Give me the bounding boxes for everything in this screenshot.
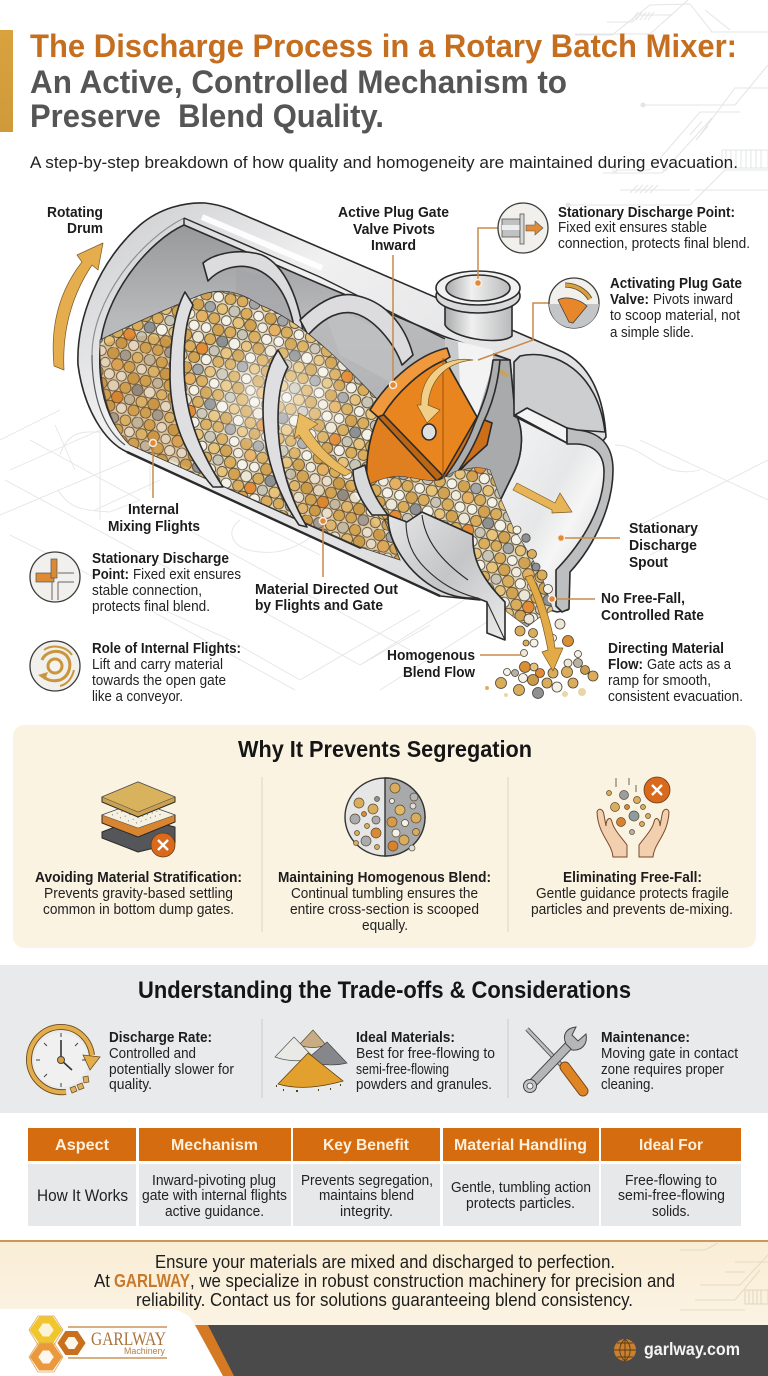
text: avoiding stratification: Prevents gravity-based settling — [44, 885, 233, 902]
table row: maintains blend — [319, 1187, 414, 1204]
arrow: flights carry material — [294, 413, 352, 476]
logo: Machinery — [124, 1346, 165, 1357]
title: The Discharge Process in a Rotary Batch Mixer: — [30, 28, 737, 64]
text: ideal materials — [356, 1029, 495, 1093]
falling particles — [485, 614, 598, 698]
footer bar — [0, 1309, 768, 1376]
callout: stationary discharge point top — [474, 203, 750, 286]
drum interior — [100, 225, 521, 548]
text: discharge rate — [109, 1029, 234, 1093]
label: no free-fall: No Free-Fall, — [601, 590, 685, 607]
label: internal mixing flights: Mixing Flights — [108, 518, 200, 535]
text: discharge rate: Discharge Rate: — [109, 1029, 212, 1046]
label: active plug gate: Active Plug Gate — [338, 204, 449, 221]
comparison table — [28, 1128, 741, 1226]
table row: semi-free-flowing — [618, 1187, 725, 1204]
cta text: GARLWAY — [114, 1271, 190, 1291]
table header: Material Handling — [454, 1137, 587, 1154]
table row: Prevents segregation, — [301, 1172, 433, 1189]
arrow: material flow down — [525, 575, 563, 671]
table header: Key Benefit — [323, 1137, 410, 1154]
blueprint background drawing — [0, 410, 768, 690]
text: ideal materials: powders and granules. — [356, 1076, 492, 1093]
text: maintaining blend: Continual tumbling ensures the — [291, 885, 478, 902]
label: homogenous blend flow — [387, 647, 522, 681]
plug gate valve — [367, 348, 492, 500]
heading: Why It Prevents Segregation — [238, 736, 532, 762]
callout: directing material flow: Gate acts as a — [647, 656, 732, 673]
front mixing flights — [170, 292, 223, 487]
rear mixing flights — [203, 252, 304, 340]
callout: stationary discharge point left: protects final blend. — [92, 598, 210, 615]
lower material stream — [365, 468, 553, 627]
label: rotating drum: Rotating — [47, 204, 103, 221]
front discharge flange — [353, 465, 505, 640]
label: homogenous blend flow: Blend Flow — [403, 664, 475, 681]
text: avoiding stratification — [35, 869, 242, 918]
callout: stationary discharge point top: connection, protects final blend. — [558, 235, 750, 252]
discharge pipe behind gate — [445, 338, 493, 417]
text: maintenance: Maintenance: — [601, 1029, 690, 1046]
text: eliminating free-fall: Gentle guidance protects fragile — [536, 885, 729, 902]
arrow: gate pivots inward — [417, 359, 473, 423]
callout: activating plug gate valve: a simple slide. — [610, 324, 694, 341]
website: garlway.com — [644, 1339, 740, 1359]
callout: role of internal flights: Lift and carry material — [92, 656, 223, 673]
table row — [37, 1172, 725, 1220]
title — [30, 28, 737, 134]
cta text — [94, 1252, 675, 1310]
text: eliminating free-fall: Eliminating Free-Fall: — [563, 869, 702, 886]
callout: role of internal flights — [30, 640, 241, 705]
call to action band — [0, 1240, 768, 1325]
cta text: At — [94, 1271, 110, 1291]
callout: stationary discharge point left — [30, 550, 241, 615]
table row: Free-flowing to — [625, 1172, 717, 1189]
cta text: Ensure your materials are mixed and discharged to perfection. — [155, 1252, 615, 1272]
callout: stationary discharge point left: stable connection, — [92, 582, 202, 599]
drum shell — [78, 203, 606, 600]
text: ideal materials: semi-free-flowing — [356, 1061, 449, 1078]
label: stationary discharge spout: Stationary — [629, 520, 699, 537]
callout: role of internal flights: towards the open gate — [92, 672, 226, 689]
label: stationary discharge spout: Spout — [629, 554, 668, 571]
icon: pipe junction — [30, 552, 80, 602]
callout: activating plug gate valve: Valve: — [610, 291, 649, 308]
callout: directing material flow: Directing Material — [608, 640, 724, 657]
website — [614, 1339, 740, 1361]
diagram: rotary batch mixer cutaway — [78, 203, 613, 698]
arrow: rotating drum — [53, 243, 103, 370]
right housing and spout — [497, 413, 610, 612]
label: no free-fall: Controlled Rate — [601, 607, 704, 624]
callout: stationary discharge point top: Stationary Discharge Point: — [558, 204, 735, 221]
arrow: spout flow — [513, 483, 572, 513]
text: maintenance: cleaning. — [601, 1076, 654, 1093]
panel: why it prevents segregation — [13, 725, 756, 948]
callout: directing material flow: Flow: — [608, 656, 643, 673]
label: active plug gate: Valve Pivots — [353, 221, 435, 238]
text: maintaining blend: Maintaining Homogenous Blend: — [278, 869, 491, 886]
table row: integrity. — [340, 1203, 393, 1220]
icon: spiral flight — [30, 641, 80, 691]
callout: activating plug gate valve: Activating Plug Gate — [610, 275, 742, 292]
label: rotating drum — [47, 204, 103, 237]
text: maintaining blend: entire cross-section is scooped — [290, 901, 479, 918]
table row: Inward-pivoting plug — [152, 1172, 276, 1189]
text: maintenance — [601, 1029, 739, 1093]
label: material directed out — [255, 518, 398, 614]
curved flight at gate — [445, 360, 500, 480]
label: material directed out: by Flights and Gate — [255, 597, 383, 614]
icon: clock — [29, 1027, 100, 1093]
text: maintenance: Moving gate in contact — [601, 1045, 739, 1062]
callout: role of internal flights: like a conveyor. — [92, 688, 183, 705]
heading: Understanding the Trade-offs & Considerations — [138, 977, 631, 1004]
table header: Ideal For — [639, 1137, 703, 1154]
text: eliminating free-fall — [531, 869, 733, 918]
callout: role of internal flights: Role of Internal Flights: — [92, 640, 241, 657]
text: maintaining blend — [278, 869, 491, 934]
label: rotating drum: Drum — [67, 220, 103, 237]
text: discharge rate: quality. — [109, 1076, 152, 1093]
label: internal mixing flights — [108, 440, 200, 535]
title: An Active, Controlled Mechanism to — [30, 64, 567, 100]
feed neck and flange — [436, 271, 520, 340]
callout: directing material flow: ramp for smooth, — [608, 672, 711, 689]
callout: stationary discharge point top: Fixed exit ensures stable — [558, 219, 707, 236]
text: discharge rate: Controlled and — [109, 1045, 196, 1062]
label: homogenous blend flow: Homogenous — [387, 647, 475, 664]
label: no free-fall — [548, 590, 704, 624]
text: avoiding stratification: Avoiding Material Stratification: — [35, 869, 242, 886]
text: maintaining blend: equally. — [362, 917, 408, 934]
table row: gate with internal flights — [142, 1187, 287, 1204]
callout: directing material flow — [608, 640, 743, 705]
label: active plug gate — [338, 204, 449, 388]
logo: GARLWAY — [91, 1329, 166, 1350]
label: stationary discharge spout — [558, 520, 699, 571]
label: material directed out: Material Directed Out — [255, 581, 398, 598]
icon: layered materials — [102, 782, 175, 857]
callout: directing material flow: consistent evacuation. — [608, 688, 743, 705]
title accent bar — [0, 30, 13, 132]
logo — [29, 1316, 167, 1372]
icon: homogenous blend circle — [345, 778, 425, 856]
icon: pivoting valve — [549, 278, 599, 328]
text: discharge rate: potentially slower for — [109, 1061, 234, 1078]
label: internal mixing flights: Internal — [128, 501, 179, 518]
callout: stationary discharge point left: Point: — [92, 566, 129, 583]
callout: stationary discharge point left: Fixed exit ensures — [133, 566, 241, 583]
text: maintenance: zone requires proper — [601, 1061, 724, 1078]
table header: Mechanism — [171, 1137, 258, 1154]
title: Preserve Blend Quality. — [30, 98, 384, 134]
text: ideal materials: Best for free-flowing to — [356, 1045, 495, 1062]
icon: hands and free-fall — [597, 777, 670, 857]
icon: wrench and screwdriver — [524, 1027, 586, 1092]
table row: active guidance. — [165, 1203, 264, 1220]
label: active plug gate: Inward — [371, 237, 416, 254]
cta text: , we specialize in robust construction machinery for precision and — [190, 1271, 675, 1291]
callout: stationary discharge point left: Stationary Discharge — [92, 550, 229, 567]
table row: solids. — [652, 1203, 690, 1220]
callout: activating plug gate valve: to scoop material, not — [610, 307, 741, 324]
text: avoiding stratification: common in bottom dump gates. — [43, 901, 234, 918]
label: stationary discharge spout: Discharge — [629, 537, 697, 554]
table row: Gentle, tumbling action — [451, 1179, 591, 1196]
table row: protects particles. — [466, 1195, 575, 1212]
table row: How It Works — [37, 1187, 128, 1205]
subtitle: A step-by-step breakdown of how quality and homogeneity are maintained during evacuation. — [30, 153, 738, 172]
callout: activating plug gate valve — [478, 275, 742, 360]
table header: Aspect — [55, 1137, 110, 1154]
panel: trade-offs and considerations — [0, 965, 768, 1113]
icon: material piles — [275, 1030, 347, 1091]
text: ideal materials: Ideal Materials: — [356, 1029, 455, 1046]
cta text: reliability. Contact us for solutions guaranteeing blend consistency. — [136, 1290, 633, 1310]
callout: activating plug gate valve: Pivots inward — [653, 291, 733, 308]
material bed — [100, 291, 400, 560]
icon: discharge connection — [498, 203, 548, 253]
text: eliminating free-fall: particles and prevents de-mixing. — [531, 901, 733, 918]
table header — [55, 1137, 703, 1154]
